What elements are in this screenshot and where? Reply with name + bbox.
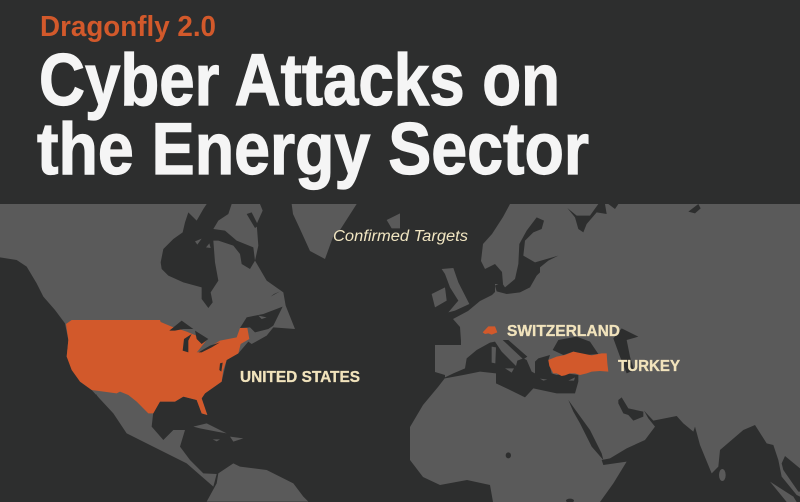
label: Turkey: TURKEY [618, 358, 680, 375]
land: Greenland [292, 204, 357, 259]
land: Sri Lanka [719, 469, 726, 481]
water: Baffin inlet [247, 212, 258, 228]
label: Switzerland: SWITZERLAND [507, 323, 620, 340]
top edge of map [0, 200, 800, 204]
land: Corsica and Sardinia [492, 347, 496, 363]
water: Lake Victoria area [566, 499, 574, 502]
water: Canadian bays [161, 204, 283, 332]
land: Anticosti Island [258, 316, 267, 319]
water: Chesapeake Bay [219, 363, 223, 372]
country: United States [66, 320, 249, 415]
water: Gulf of Thailand [782, 456, 800, 492]
title line 1: Cyber Attacks on [39, 40, 560, 121]
land: Cyprus [568, 377, 575, 381]
land: Crete [540, 379, 547, 381]
water: Baltic Sea [495, 217, 558, 294]
water: Caspian Sea [613, 328, 638, 373]
water: northern inlet [688, 204, 701, 213]
map: inland seas east of Europe [553, 204, 701, 373]
label: United States: UNITED STATES [240, 369, 360, 386]
water: Gulf of St Lawrence [240, 307, 283, 332]
caption: Confirmed Targets: Confirmed Targets [333, 228, 468, 245]
land: Great Britain [442, 268, 469, 312]
country: Switzerland [483, 326, 497, 335]
map: Mediterranean and Africa details [445, 340, 608, 502]
land: Caribbean islands [193, 423, 243, 442]
water: Lake Chad [506, 452, 511, 458]
water: Gulf of California [96, 394, 113, 423]
water: Persian Gulf [618, 397, 643, 421]
land: Iceland [387, 213, 400, 228]
subtitle: Dragonfly 2.0: Dragonfly 2.0 [40, 11, 216, 43]
water: White Sea [567, 204, 607, 232]
map: northern Europe [432, 204, 618, 335]
water: Arctic inlet [608, 204, 618, 209]
water: Red Sea [568, 400, 603, 460]
water: Great Lakes [169, 321, 220, 352]
map: Indian Ocean region [600, 397, 800, 502]
title line 2: the Energy Sector [37, 109, 589, 190]
water: Mediterranean Sea [445, 342, 578, 397]
water: Indian Ocean [600, 411, 800, 502]
land: Ireland [432, 287, 447, 307]
land: Sumatra [770, 482, 797, 502]
water: Hudson Bay and Arctic channels [161, 204, 255, 308]
land: Southampton Island [195, 239, 211, 248]
land: Eurasia and Africa [410, 204, 800, 502]
land: North America [0, 204, 295, 487]
water: Adriatic Sea [503, 340, 527, 359]
water: Black Sea [553, 337, 598, 355]
land: Sicily [505, 368, 514, 373]
map: Americas [0, 204, 400, 502]
country: Turkey [548, 352, 608, 376]
water: Labrador inlet [271, 291, 280, 297]
land: South America [207, 463, 308, 502]
map: world regions [0, 200, 800, 502]
